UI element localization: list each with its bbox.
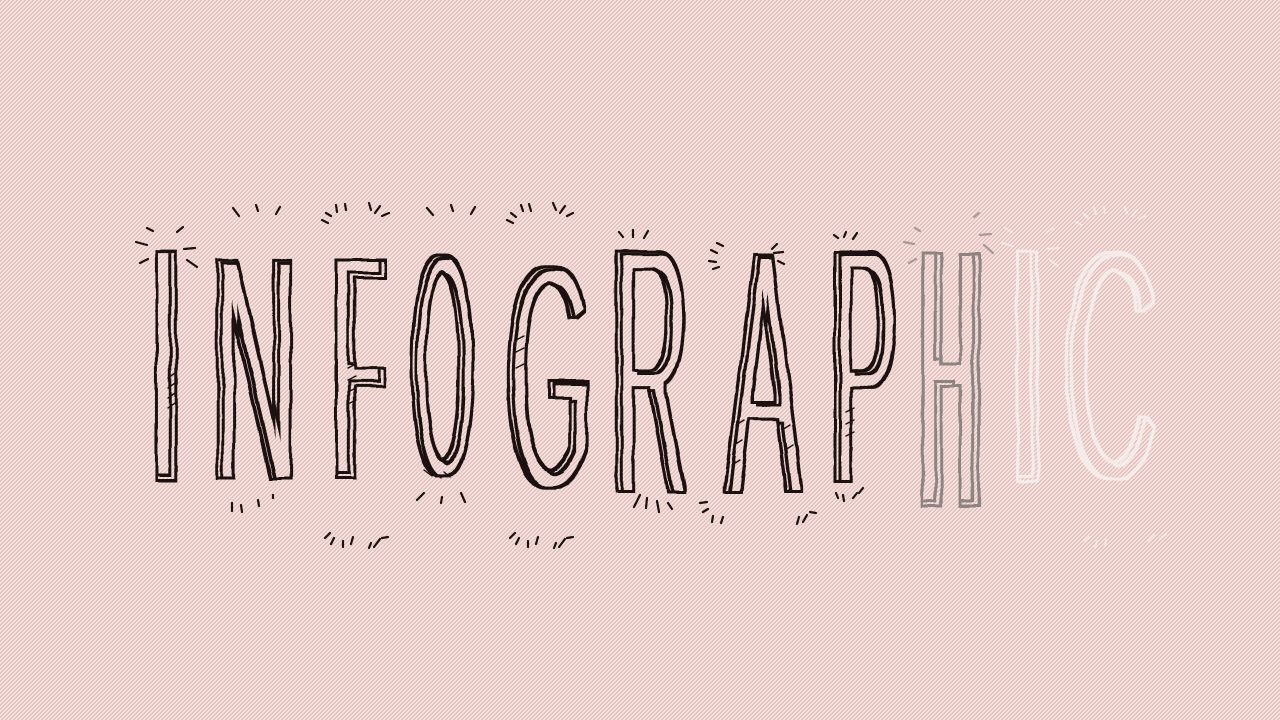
title word: INFOGRAPHIC (153, 168, 1157, 590)
sparkle ticks around grey letter H (904, 213, 993, 263)
sparkle ticks around white letters (1002, 207, 1166, 547)
letter O: O (411, 185, 474, 547)
letter G: G (506, 196, 592, 559)
letter N: N (211, 183, 297, 554)
sparkle ticks around black letters (136, 203, 863, 548)
letter A: A (727, 174, 800, 573)
straight black letters I and F: I (153, 175, 180, 558)
letter R: R (612, 170, 688, 573)
straight black letters I and F: F (336, 185, 384, 552)
fading white letter C: C (1064, 179, 1157, 552)
wider black letters N O G R A P (211, 170, 896, 573)
letter P: P (830, 173, 896, 561)
straight black letters I and F (153, 175, 384, 558)
fading grey letter H: H (922, 168, 980, 590)
fading white letter I: I (1014, 176, 1041, 557)
hatching shading on letter sides (168, 336, 854, 478)
